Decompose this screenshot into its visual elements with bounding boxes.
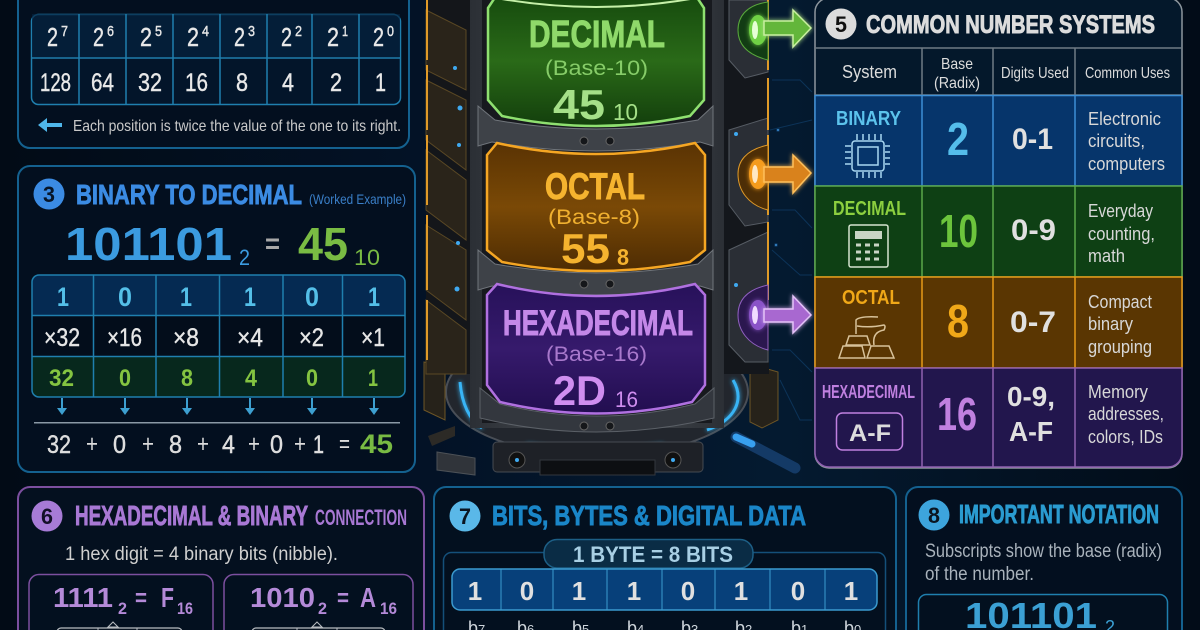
place value table: 2 [47, 22, 58, 52]
place value table: 7 [61, 23, 68, 40]
row: octal: OCTAL [842, 287, 900, 309]
drum: octal: 55 [561, 225, 610, 272]
row: hexadecimal: 0-9, [1007, 381, 1055, 412]
bit row: 0 [520, 576, 534, 606]
panel 3: binary to decimal [18, 166, 415, 472]
example: 1010 = A: 1010 [250, 582, 315, 613]
place value table: 2 [93, 22, 104, 52]
drum: decimal: DECIMAL [529, 14, 665, 56]
header row: System [842, 62, 897, 82]
sum line [47, 429, 393, 459]
row: hexadecimal: addresses, [1088, 404, 1164, 424]
row: octal: Compact [1088, 292, 1152, 312]
sum line: = [339, 430, 350, 458]
conversion table: 0 [305, 282, 319, 312]
place value table: 2 [140, 22, 152, 52]
note text: Each position is twice the value of the one to its right. [73, 118, 401, 135]
row: binary: BINARY [836, 108, 902, 130]
header row [815, 48, 1182, 95]
badge 3 [34, 178, 64, 210]
example: 1111 = F: 1111 [53, 582, 113, 613]
conversion table: 4 [245, 365, 258, 392]
base ring [428, 328, 795, 475]
sum line: 4 [222, 431, 235, 459]
steel band 1 [478, 106, 713, 151]
header row: Common Uses [1085, 65, 1170, 82]
row: decimal: math [1088, 246, 1125, 266]
example: 1111 = F: 2 [118, 599, 127, 618]
drum: octal: (Base-8) [548, 206, 640, 229]
sum line: 45 [360, 429, 393, 459]
row: octal [815, 277, 1182, 368]
badge 5: 5 [835, 12, 847, 37]
row: hexadecimal: colors, IDs [1088, 427, 1163, 447]
row: decimal: DECIMAL [833, 198, 906, 220]
drum: hexadecimal: HEXADECIMAL [503, 304, 693, 343]
example: 1111 = F [29, 574, 213, 630]
header row: Base [941, 56, 973, 73]
row: binary: computers [1088, 154, 1165, 174]
A-F chip [836, 413, 902, 450]
conversion table: 1 [244, 282, 256, 312]
steel band 3 [480, 388, 714, 432]
connector: hexadecimal [738, 285, 768, 350]
row: decimal: 0-9 [1011, 214, 1056, 247]
panel 8: important notation [906, 487, 1182, 630]
badge 5 [826, 8, 856, 40]
rule text: 1 hex digit = 4 binary bits (nibble). [65, 544, 338, 565]
right machinery column [722, 0, 769, 374]
place value table: 64 [91, 69, 114, 97]
place value table: 8 [236, 69, 248, 97]
row: octal: 0-7 [1010, 306, 1056, 339]
badge 7 [450, 500, 480, 532]
drum: decimal: 45 [553, 81, 605, 128]
icon: calculator [849, 225, 888, 267]
conversion table: ×4 [237, 324, 263, 352]
place value table: 4 [202, 23, 209, 40]
sum line: 0 [270, 431, 283, 459]
conversion table: 0 [306, 365, 318, 392]
place value table: 2 [187, 22, 199, 52]
place value table: 2 [327, 22, 339, 52]
bit labels [468, 618, 861, 630]
example: 1010 = A: A [360, 582, 376, 613]
badge 8 [918, 500, 950, 530]
conversion table: ×32 [44, 324, 80, 352]
heading: BITS, BYTES & DIGITAL DATA [492, 500, 806, 531]
conversion table: 32 [49, 365, 74, 392]
icon: left arrow [38, 118, 62, 132]
row: binary: 0-1 [1012, 123, 1053, 156]
bit row: 1 [844, 576, 858, 606]
badge 6: 6 [41, 504, 53, 529]
connector: octal [738, 145, 768, 210]
equation: = [265, 228, 280, 259]
notation example [918, 594, 1168, 630]
steel column [470, 0, 724, 428]
conversion table: ×16 [107, 324, 142, 352]
place value table: 2 [234, 22, 245, 52]
row: hexadecimal: 16 [937, 388, 977, 440]
example: 1010 = A: 2 [318, 599, 327, 618]
conversion table [32, 275, 405, 397]
arrow: hexadecimal [764, 296, 811, 333]
example: 1010 = A [224, 574, 413, 630]
row: decimal: Everyday [1088, 201, 1153, 221]
byte pill: 1 BYTE = 8 BITS [573, 542, 733, 567]
place value table: 4 [282, 69, 294, 97]
example: 1111 = F: F [161, 582, 174, 613]
row: binary: 2 [947, 113, 969, 165]
bit row: 1 [572, 576, 586, 606]
connector: decimal [738, 2, 768, 60]
byte bracket [444, 552, 886, 630]
sum line: 8 [169, 431, 182, 459]
example: 1111 = F: 16 [177, 599, 193, 618]
right shoulder [750, 364, 778, 428]
place value table: 1 [342, 23, 348, 40]
drum: hexadecimal: (Base-16) [546, 343, 647, 366]
example: 1010 = A: = [337, 585, 349, 612]
row: decimal: counting, [1088, 224, 1155, 244]
conversion table: 8 [181, 365, 193, 392]
equation: 10 [354, 245, 380, 270]
row: binary: circuits, [1088, 131, 1145, 151]
sum line: + [248, 430, 260, 458]
drum: decimal: 10 [613, 99, 638, 125]
place value table: 16 [185, 69, 208, 97]
row: octal: 8 [947, 295, 969, 347]
place value table: 32 [138, 69, 162, 97]
heading note: (Worked Example) [309, 191, 406, 207]
left shoulder [424, 362, 445, 420]
badge 3: 3 [43, 182, 55, 207]
equation: 2 [239, 245, 250, 270]
row: hexadecimal: HEXADECIMAL [822, 382, 915, 402]
bit row [452, 569, 877, 610]
sum line: + [197, 430, 209, 458]
place value table: 2 [295, 23, 302, 40]
conversion table: ×2 [299, 324, 324, 352]
drum: hexadecimal: 2D [553, 367, 606, 414]
equation: 101101 [65, 218, 232, 270]
bit row: 1 [734, 576, 748, 606]
description: of the number. [925, 564, 1034, 585]
example: 1111 = F: = [135, 585, 147, 612]
place value table: 0 [387, 23, 394, 40]
conversion table: ×8 [173, 324, 199, 352]
arrow: octal [764, 155, 811, 193]
panel 7: bits and bytes [434, 487, 896, 630]
panel 5: common number systems [815, 0, 1182, 468]
icon: chip [845, 134, 890, 178]
drum: decimal: (Base-10) [545, 57, 648, 80]
row: decimal: 10 [939, 205, 978, 257]
heading: HEXADECIMAL & BINARY [75, 500, 308, 531]
bit row: 1 [468, 576, 482, 606]
bit row: 1 [627, 576, 641, 606]
conversion table: 1 [368, 282, 380, 312]
drum: decimal [488, 0, 704, 128]
place value table: 5 [155, 23, 162, 40]
example: 1010 = A: 16 [380, 599, 397, 618]
bit row: 0 [791, 576, 805, 606]
row: decimal [815, 186, 1182, 277]
header row: (Radix) [934, 75, 980, 92]
place value table: 128 [40, 69, 71, 97]
description: Subscripts show the base (radix) [925, 541, 1162, 562]
row: octal: grouping [1088, 337, 1152, 357]
row: hexadecimal: Memory [1088, 382, 1148, 402]
row: hexadecimal [815, 368, 1182, 467]
circuit trace backdrop [770, 80, 812, 420]
conversion table: 0 [119, 365, 131, 392]
row: binary: Electronic [1088, 109, 1161, 129]
drum: octal: OCTAL [545, 166, 645, 207]
conversion table: 1 [368, 365, 378, 392]
drum: hexadecimal: 16 [615, 387, 638, 412]
badge 6 [32, 500, 62, 532]
left machinery column [426, 0, 472, 374]
sum line: 32 [47, 431, 71, 459]
A-F chip: A-F [849, 420, 891, 447]
sum line: + [142, 430, 154, 458]
heading suffix: CONNECTION [315, 505, 407, 530]
place value table: 2 [281, 22, 292, 52]
place value table: 2 [373, 22, 384, 52]
central tower [424, 0, 811, 475]
arrow: decimal [764, 10, 811, 47]
panel 6: hexadecimal and binary connection [18, 487, 424, 630]
sum line: + [294, 430, 306, 458]
steel band 2 [478, 250, 713, 295]
heading: BINARY TO DECIMAL [76, 179, 302, 210]
sum line: 0 [113, 431, 126, 459]
conversion table: 1 [57, 282, 69, 312]
place value table: 3 [248, 23, 255, 40]
badge 8: 8 [928, 503, 940, 528]
place value table: 1 [375, 69, 386, 97]
row: binary [815, 95, 1182, 186]
header row: Digits Used [1001, 65, 1069, 82]
down arrows [57, 398, 379, 415]
drum: octal: 8 [617, 244, 629, 270]
place value table [32, 14, 401, 104]
equation [65, 218, 380, 270]
bit row: 0 [681, 576, 695, 606]
badge 7: 7 [459, 504, 471, 529]
row: octal: binary [1088, 314, 1133, 334]
conversion table: 1 [180, 282, 192, 312]
conversion table: 0 [118, 282, 132, 312]
place value table: 6 [107, 23, 114, 40]
description [925, 541, 1162, 585]
panel 2: place values [18, 0, 409, 148]
equation: 45 [298, 218, 348, 270]
sum line: + [86, 430, 98, 458]
place value table: 2 [330, 69, 342, 97]
row: hexadecimal: A-F [1009, 416, 1053, 447]
icon: gold bars [839, 317, 894, 358]
conversion table: ×1 [361, 324, 385, 352]
sum line: 1 [313, 431, 324, 459]
sum divider [34, 422, 400, 424]
drum: octal [487, 143, 705, 272]
drum: hexadecimal [487, 284, 705, 414]
